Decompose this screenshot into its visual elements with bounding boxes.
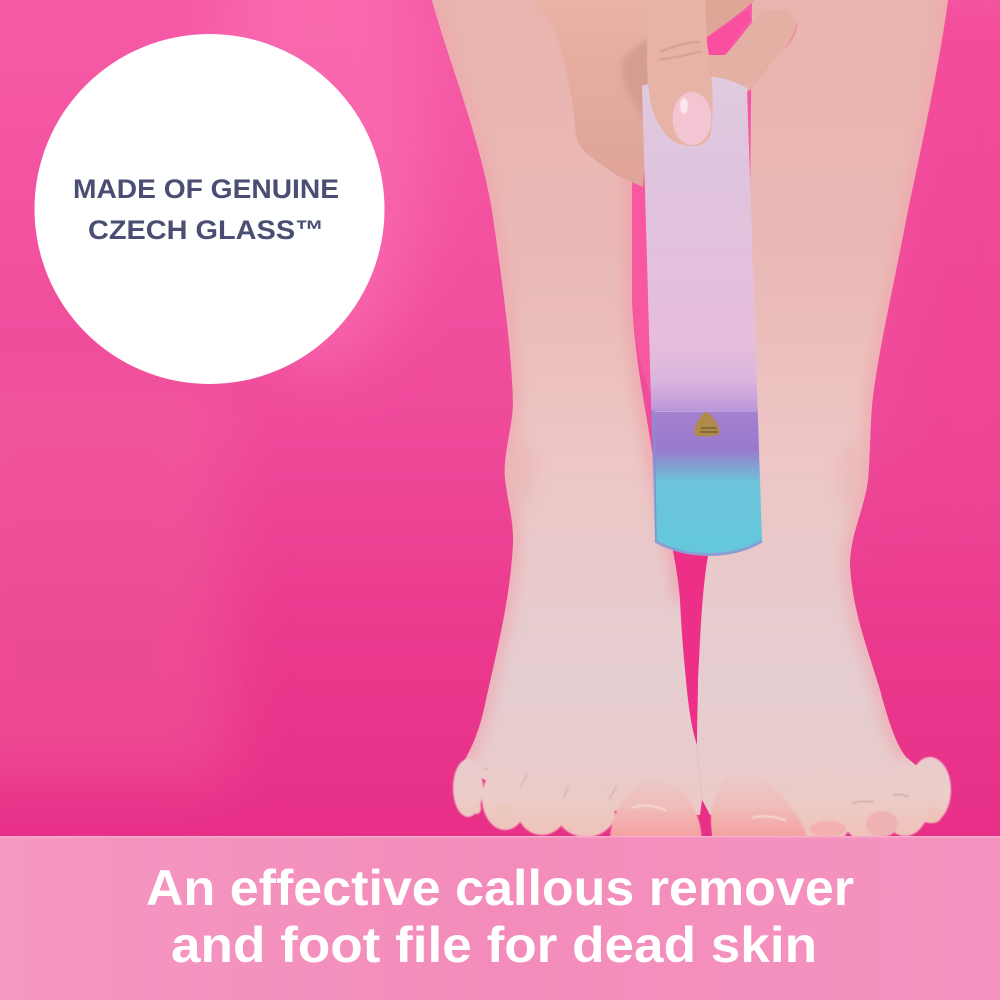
index finger over file xyxy=(647,0,713,146)
toes: left foot xyxy=(453,759,702,840)
left leg and foot xyxy=(432,0,702,840)
gold triangle label xyxy=(694,412,719,436)
caption text: An effective callous remover xyxy=(146,860,854,916)
toes: right foot xyxy=(711,757,951,847)
top of hand right of finger xyxy=(700,0,755,38)
pink gap beside file xyxy=(632,180,652,396)
leg edge shading xyxy=(432,0,680,765)
caption text xyxy=(146,860,854,973)
glass foot file xyxy=(642,76,762,555)
ring finger xyxy=(708,9,796,92)
hand holding file xyxy=(535,0,797,187)
pink gap in fingers xyxy=(706,10,750,56)
palm shadow behind finger xyxy=(622,40,652,120)
blue bottom edge xyxy=(655,541,762,555)
badge text: MADE OF GENUINE xyxy=(73,174,339,204)
caption text: and foot file for dead skin xyxy=(171,917,817,973)
badge text: CZECH GLASS™ xyxy=(88,215,324,245)
white circle badge xyxy=(34,34,384,384)
toe creases and nails: left foot xyxy=(484,768,666,811)
leg edge shading xyxy=(838,0,948,757)
frosted-to-clear line xyxy=(654,410,757,412)
bottom caption band xyxy=(0,836,1000,1000)
badge text xyxy=(73,174,339,245)
pink gap between ankles xyxy=(668,540,712,760)
fingernail xyxy=(672,92,712,145)
back of hand xyxy=(535,0,660,187)
right leg and foot xyxy=(697,0,951,847)
dark gap between big toes xyxy=(702,800,712,836)
